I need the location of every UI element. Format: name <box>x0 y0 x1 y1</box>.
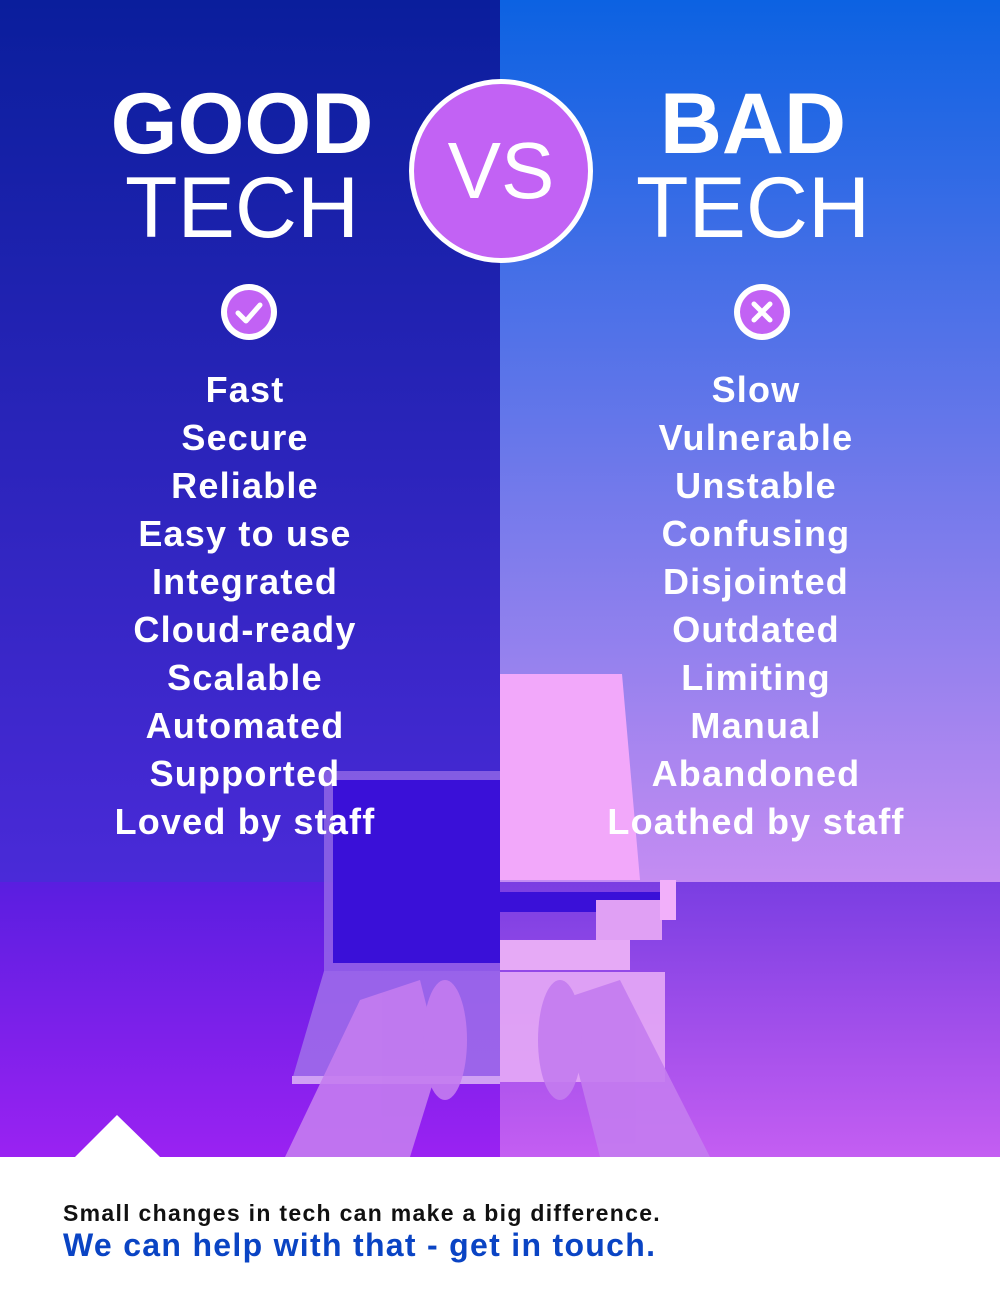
bad list: Disjointed <box>663 561 849 602</box>
title: bad tech: TECH <box>636 160 870 256</box>
good list: Supported <box>150 753 340 794</box>
good list: Integrated <box>152 561 338 602</box>
bad list: Outdated <box>672 609 840 650</box>
vs circle: VS <box>448 126 554 215</box>
title: good tech: TECH <box>125 160 359 256</box>
title: bad tech <box>636 76 870 256</box>
good list: Easy to use <box>138 513 352 554</box>
good list: Secure <box>181 417 309 458</box>
bad list: Manual <box>690 705 822 746</box>
title: bad tech: BAD <box>660 76 846 172</box>
vs circle <box>409 79 593 263</box>
good list <box>115 369 375 842</box>
good list: Fast <box>206 369 284 410</box>
bad list: Loathed by staff <box>607 801 905 842</box>
hands <box>285 980 710 1157</box>
good list: Automated <box>146 705 344 746</box>
title: good tech <box>111 76 373 256</box>
icon: check <box>221 284 277 340</box>
footer text <box>63 1200 661 1263</box>
bad list: Vulnerable <box>659 417 853 458</box>
typewriter <box>500 674 676 1082</box>
good list: Reliable <box>171 465 319 506</box>
good list: Scalable <box>167 657 323 698</box>
good list: Cloud-ready <box>133 609 357 650</box>
footer text: We can help with that - get in touch. <box>63 1227 656 1263</box>
bad list: Abandoned <box>652 753 860 794</box>
icon: cross <box>734 284 790 340</box>
bad list: Limiting <box>681 657 831 698</box>
footer text: Small changes in tech can make a big difference. <box>63 1200 661 1226</box>
bad list <box>607 369 905 842</box>
good list: Loved by staff <box>115 801 375 842</box>
bad list: Slow <box>712 369 800 410</box>
triangle pointer <box>75 1115 160 1157</box>
bad list: Confusing <box>662 513 850 554</box>
bad list: Unstable <box>675 465 837 506</box>
title: good tech: GOOD <box>111 76 373 172</box>
laptop <box>292 771 500 1084</box>
